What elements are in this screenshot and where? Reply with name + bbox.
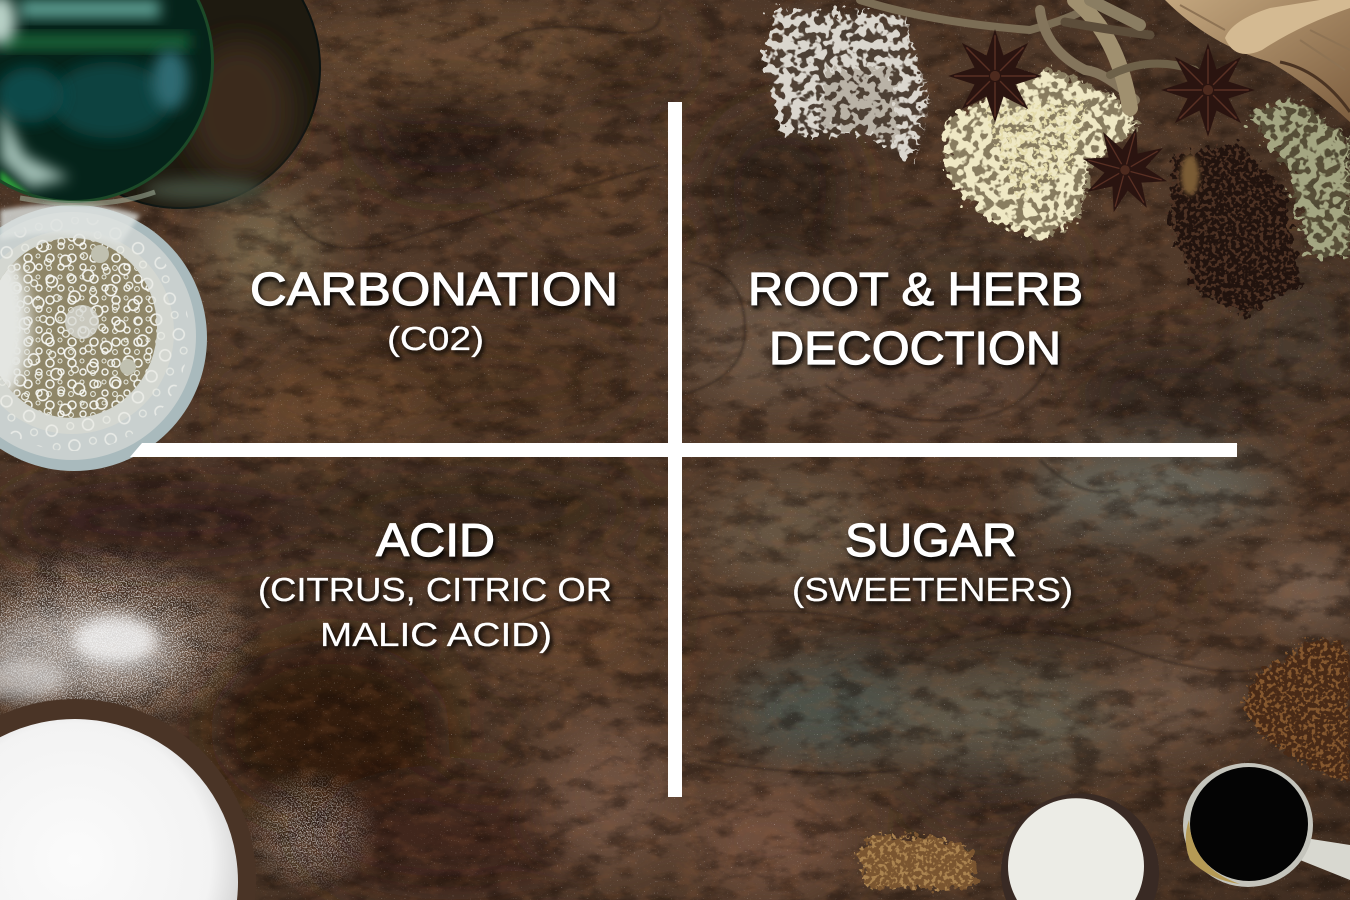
- photo: green glass bottle: [0, 0, 220, 210]
- quadrant label: acid: [258, 514, 612, 653]
- quadrant label: carbonation: CARBONATION: [250, 263, 618, 315]
- photo: brown sugar mound, right: [1244, 639, 1350, 782]
- photo: measuring cup of dark syrup: [1183, 763, 1350, 887]
- dividers: white cross: [130, 102, 1237, 797]
- quadrant label: acid: MALIC ACID): [320, 616, 552, 653]
- quadrant label: root and herb decoction: ROOT & HERB: [748, 263, 1083, 315]
- photo: sparkling water glass: [0, 204, 207, 471]
- quadrant label: sugar: [792, 514, 1073, 608]
- quadrant label: acid: (CITRUS, CITRIC OR: [258, 571, 612, 608]
- photo: brown sugar mound, bottom: [858, 835, 975, 888]
- photo: fennel seeds: [1250, 100, 1350, 255]
- photo: dried mushroom slices: [1165, 0, 1350, 122]
- quadrant label: carbonation: [250, 263, 618, 357]
- photo: spilled citric acid: [0, 540, 380, 895]
- photo: roots and herbs pile: [765, 0, 1350, 315]
- photo: dark glass base behind green bottle: [40, 0, 320, 208]
- quadrant label: acid: ACID: [376, 514, 495, 566]
- photo: small bowl of white sugar: [1001, 793, 1159, 900]
- photo: pale ginger chips: [945, 70, 1140, 240]
- photo: bowl of white acid powder: [0, 699, 256, 900]
- quadrant label: carbonation: (C02): [387, 320, 484, 357]
- quadrant label: sugar: (SWEETENERS): [792, 571, 1073, 608]
- quadrant label: root and herb decoction: [748, 263, 1083, 374]
- quadrant label: sugar: SUGAR: [845, 514, 1017, 566]
- photo: grey chopped root: [765, 10, 930, 160]
- quadrant label: root and herb decoction: DECOCTION: [769, 322, 1061, 374]
- photo: woody roots: [860, 0, 1195, 108]
- icon: star anise pods: [948, 29, 1255, 224]
- photo: dark cloves and bark: [1170, 145, 1300, 315]
